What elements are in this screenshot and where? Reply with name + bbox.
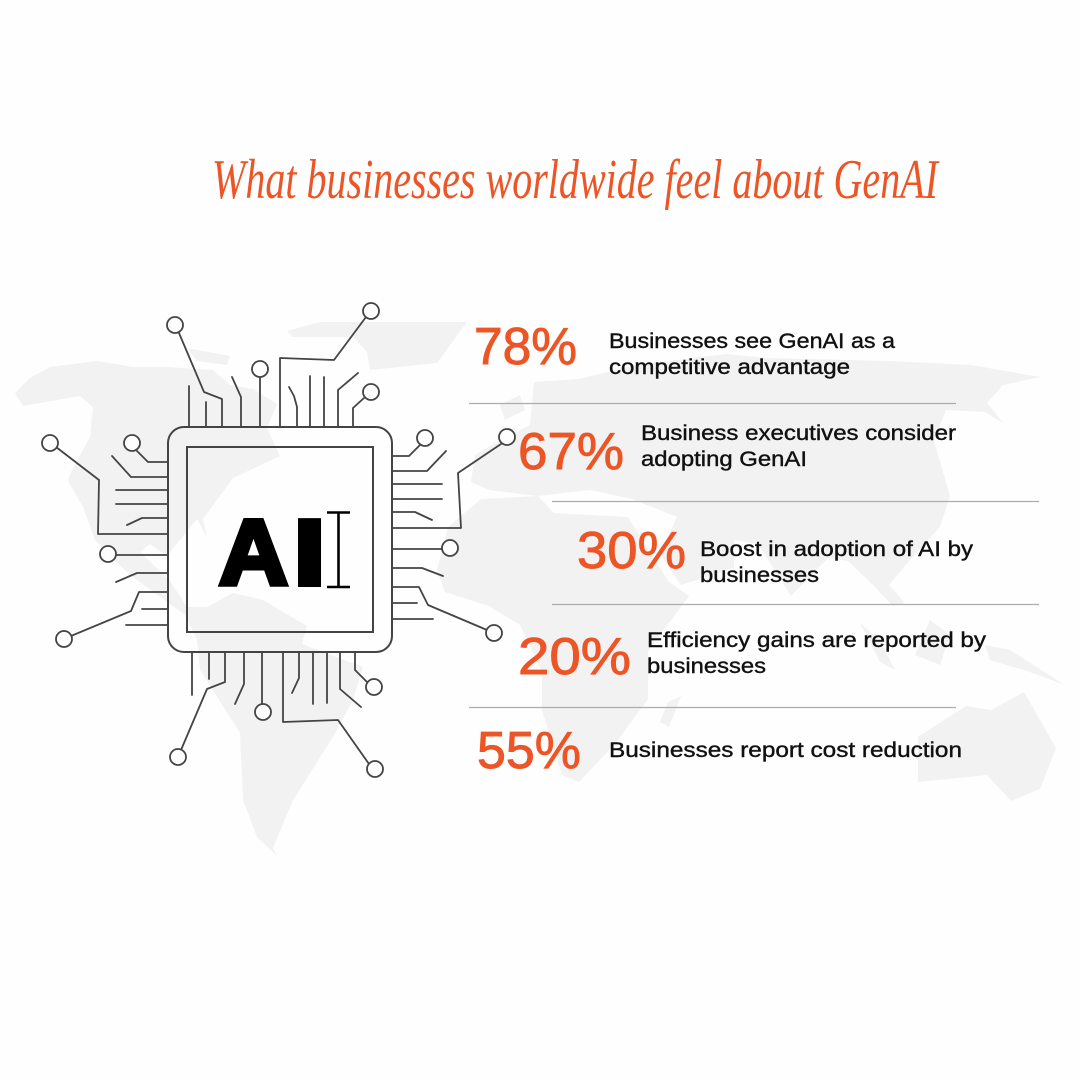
chip body [168, 427, 392, 652]
text cursor icon [327, 512, 350, 587]
circuit traces [56, 317, 501, 764]
AI lettering: A [219, 500, 288, 604]
stat: 20% efficiency gains: 20% [518, 628, 631, 686]
stat: 78% competitive advantage: 78% [474, 318, 577, 376]
stat: 20% efficiency gains [518, 628, 987, 686]
stat: 67% executives consider adopting: 67% [518, 423, 624, 481]
AI chip illustration [42, 303, 515, 777]
AI lettering: I [293, 501, 326, 605]
stat: 20% efficiency gains: Efficiency gains are reported by [647, 629, 987, 652]
stat: 30% boost in adoption: 30% [577, 522, 686, 580]
stat: 30% boost in adoption: Boost in adoption of AI by [700, 538, 974, 561]
stat: 78% competitive advantage: Businesses see GenAI as a [609, 330, 895, 353]
stat: 30% boost in adoption [577, 522, 974, 587]
stat: 78% competitive advantage [474, 318, 895, 379]
chip inner square [187, 447, 373, 632]
stat: 55% cost reduction: Businesses report cost reduction [609, 739, 962, 762]
stat: 30% boost in adoption: businesses [700, 564, 819, 587]
stat: 67% executives consider adopting: Business executives consider [641, 422, 956, 445]
AI lettering [219, 500, 326, 605]
stat: 67% executives consider adopting [518, 422, 956, 481]
stat: 78% competitive advantage: competitive advantage [609, 356, 850, 379]
stat: 55% cost reduction: 55% [477, 722, 581, 780]
dividers [469, 404, 1039, 708]
stat: 55% cost reduction [477, 722, 962, 780]
world map background [15, 322, 1065, 856]
stat: 67% executives consider adopting: adopting GenAI [641, 448, 807, 471]
stat: 20% efficiency gains: businesses [647, 655, 766, 678]
circuit nodes [42, 303, 515, 777]
